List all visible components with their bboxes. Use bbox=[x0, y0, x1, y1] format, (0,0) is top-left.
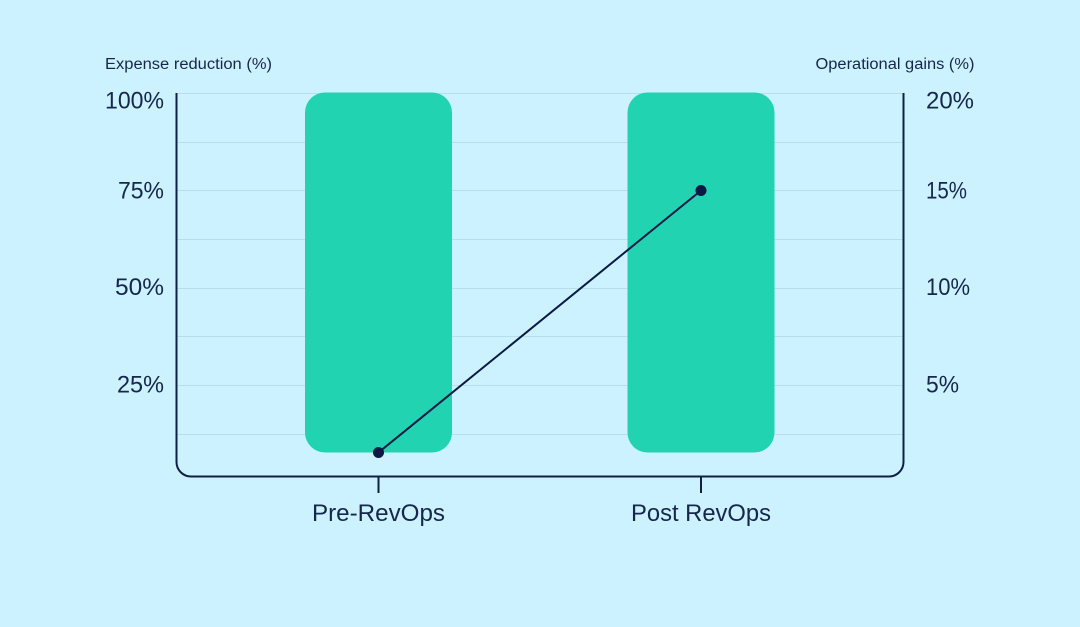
right axis labels bbox=[926, 88, 974, 398]
trend line bbox=[373, 185, 706, 458]
left axis labels: 75% bbox=[118, 178, 164, 204]
x axis tick: Pre-RevOps bbox=[378, 477, 380, 493]
x axis tick: Post RevOps bbox=[700, 477, 702, 493]
right axis labels: 20% bbox=[926, 88, 974, 114]
right axis title: Operational gains (%) bbox=[816, 56, 974, 73]
right axis labels: 10% bbox=[926, 274, 970, 301]
bar: Pre-RevOps bbox=[305, 92, 452, 452]
right axis labels: 5% bbox=[926, 372, 959, 398]
right axis labels: 15% bbox=[926, 178, 967, 204]
x label: Post RevOps: Post RevOps bbox=[631, 500, 771, 527]
x label: Pre-RevOps: Pre-RevOps bbox=[312, 500, 445, 527]
left axis labels: 25% bbox=[117, 372, 164, 398]
left axis labels: 100% bbox=[105, 88, 164, 114]
left axis labels bbox=[105, 88, 164, 398]
left axis labels: 50% bbox=[115, 274, 164, 301]
axes frame bbox=[176, 93, 904, 476]
bar: Post RevOps bbox=[628, 92, 774, 452]
left axis title: Expense reduction (%) bbox=[105, 56, 272, 73]
